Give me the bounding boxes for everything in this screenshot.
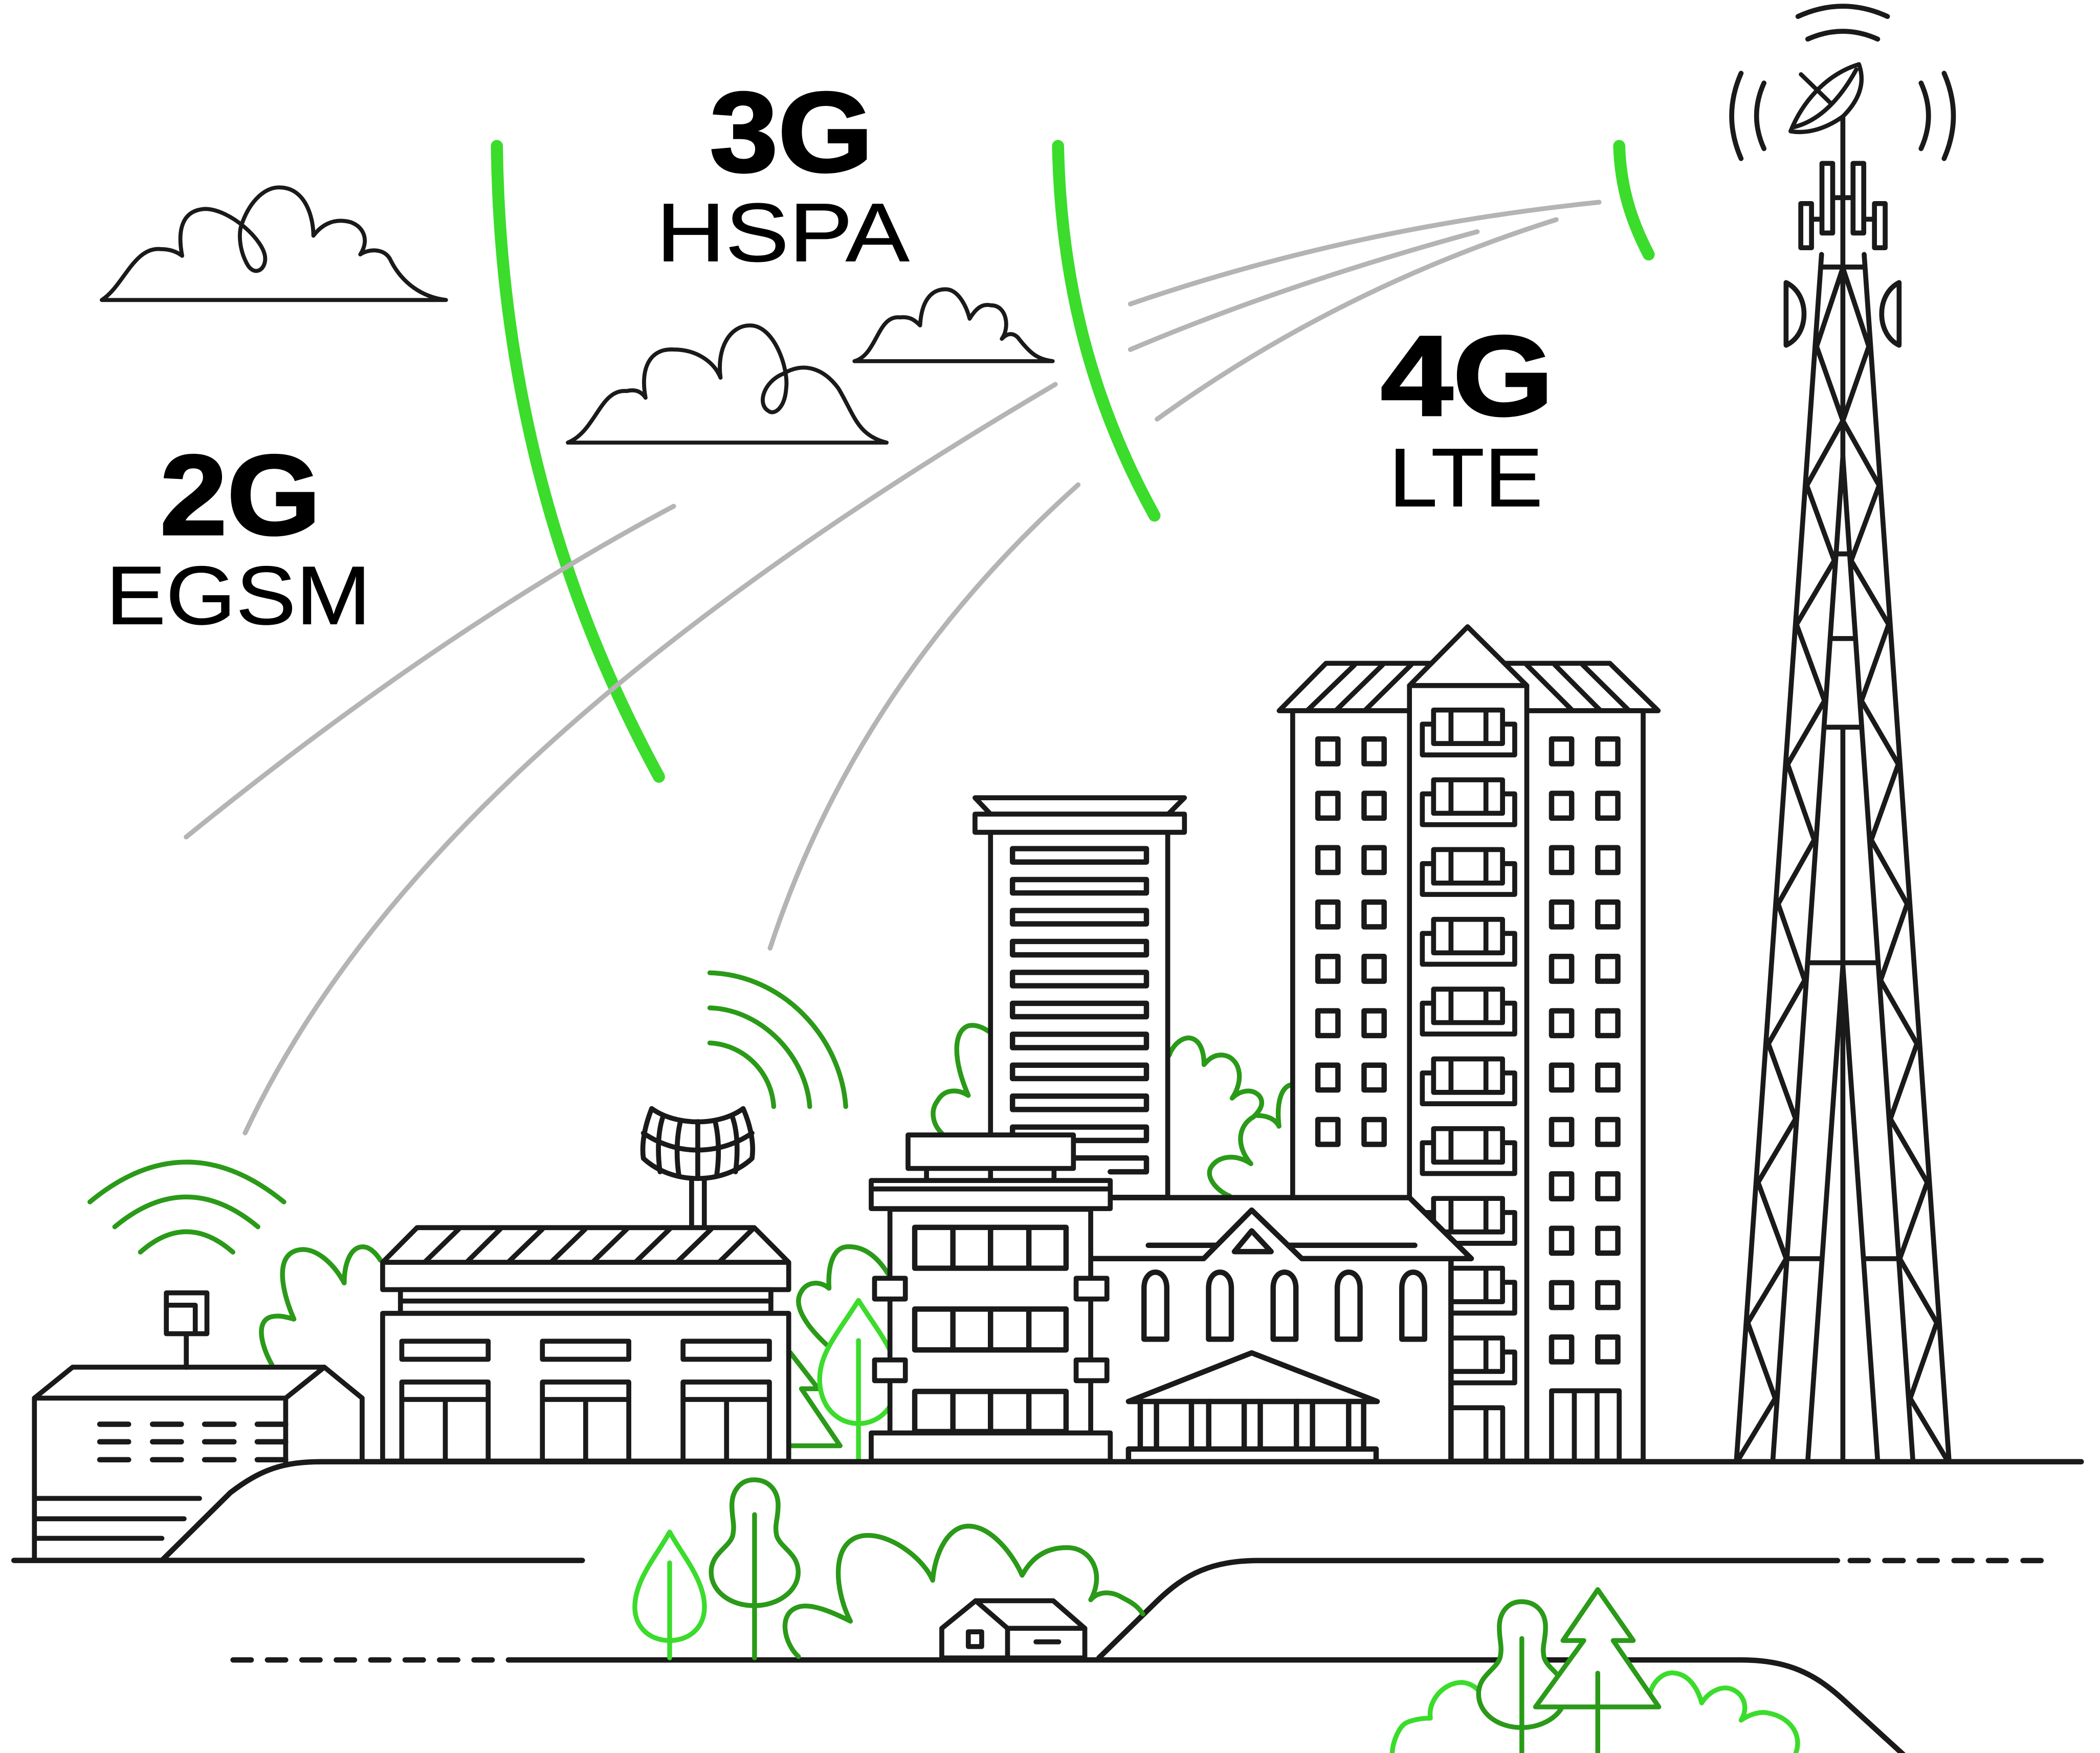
label: 2G EGSM: EGSM: [106, 550, 371, 642]
transmission tower: [1732, 6, 1953, 1461]
block side pods: [875, 1278, 1107, 1381]
label: 3G HSPA: 3G: [710, 69, 873, 196]
label: 4G LTE: LTE: [1389, 431, 1543, 524]
tower lattice: [1736, 254, 1949, 1461]
bush: lower right: [1392, 1673, 1798, 1753]
block windows: [915, 1228, 1066, 1432]
bush: behind warehouse: [261, 1247, 381, 1365]
tall office tower: [975, 798, 1184, 1197]
signal arcs: warehouse: [90, 1162, 284, 1252]
label: 4G LTE: [1381, 313, 1554, 524]
fir tree: lower right: [1536, 1590, 1659, 1753]
house porch: [1129, 1353, 1377, 1461]
tower window strips: [1012, 849, 1146, 1172]
signal arcs: roof dish: [710, 973, 846, 1107]
signal wave fronts: [497, 146, 1649, 777]
label: 3G HSPA: HSPA: [656, 186, 910, 279]
small house: [942, 1601, 1085, 1658]
leaf tree beside block: [820, 1300, 897, 1461]
long building roof: [383, 1228, 789, 1313]
bush: behind small house: [785, 1526, 1143, 1657]
roof dish antenna: [643, 1109, 753, 1228]
bush: behind tall tower right: [1169, 1038, 1291, 1196]
long low building: [383, 1109, 789, 1461]
tower signal arcs: [1732, 6, 1953, 159]
roads: [14, 1462, 2081, 1753]
cloud: centre large: [568, 325, 887, 443]
apartment building: [1279, 627, 1658, 1461]
label: 2G EGSM: [106, 432, 371, 642]
warehouse wall lines: [34, 1498, 200, 1538]
round tree: lower right: [1478, 1602, 1565, 1753]
apartment door: [1552, 1391, 1619, 1461]
apartment windows: [1318, 739, 1618, 1362]
tower dish: [1790, 64, 1862, 132]
signal beams: [186, 202, 1599, 1133]
apartment roof: [1279, 663, 1658, 711]
long building windows: [402, 1341, 769, 1360]
fir tree behind block: [790, 1352, 840, 1446]
house with gable roof: [1092, 1198, 1471, 1461]
warehouse body: [34, 1367, 362, 1561]
bush: behind tall tower left: [933, 1025, 988, 1133]
label: 4G LTE: 4G: [1381, 313, 1554, 440]
cloud: upper left: [102, 187, 446, 300]
round tree: lower left: [711, 1480, 798, 1658]
house roof and walls: [1092, 1198, 1471, 1461]
warehouse antenna: [166, 1293, 207, 1367]
leaf tree: lower left: [635, 1532, 704, 1658]
house arched windows: [1144, 1272, 1425, 1339]
tower mast and antennas: [1786, 118, 1899, 1461]
block base: [871, 1433, 1110, 1461]
block walls: [871, 1135, 1110, 1461]
long building walls: [383, 1313, 789, 1461]
long building doors: [402, 1382, 769, 1461]
cloud: centre small: [854, 289, 1053, 361]
house roof lines: [1092, 1198, 1471, 1461]
bush: left of block: [799, 1246, 888, 1345]
tower body: [975, 798, 1184, 1197]
label: 3G HSPA: [656, 69, 910, 279]
apartment balconies: [1422, 710, 1515, 1461]
label: 2G EGSM: 2G: [160, 432, 321, 559]
mid-rise block: [871, 1135, 1110, 1461]
apartment walls: [1293, 627, 1643, 1461]
warehouse building: [34, 1293, 362, 1561]
warehouse vent dashes: [100, 1424, 285, 1460]
